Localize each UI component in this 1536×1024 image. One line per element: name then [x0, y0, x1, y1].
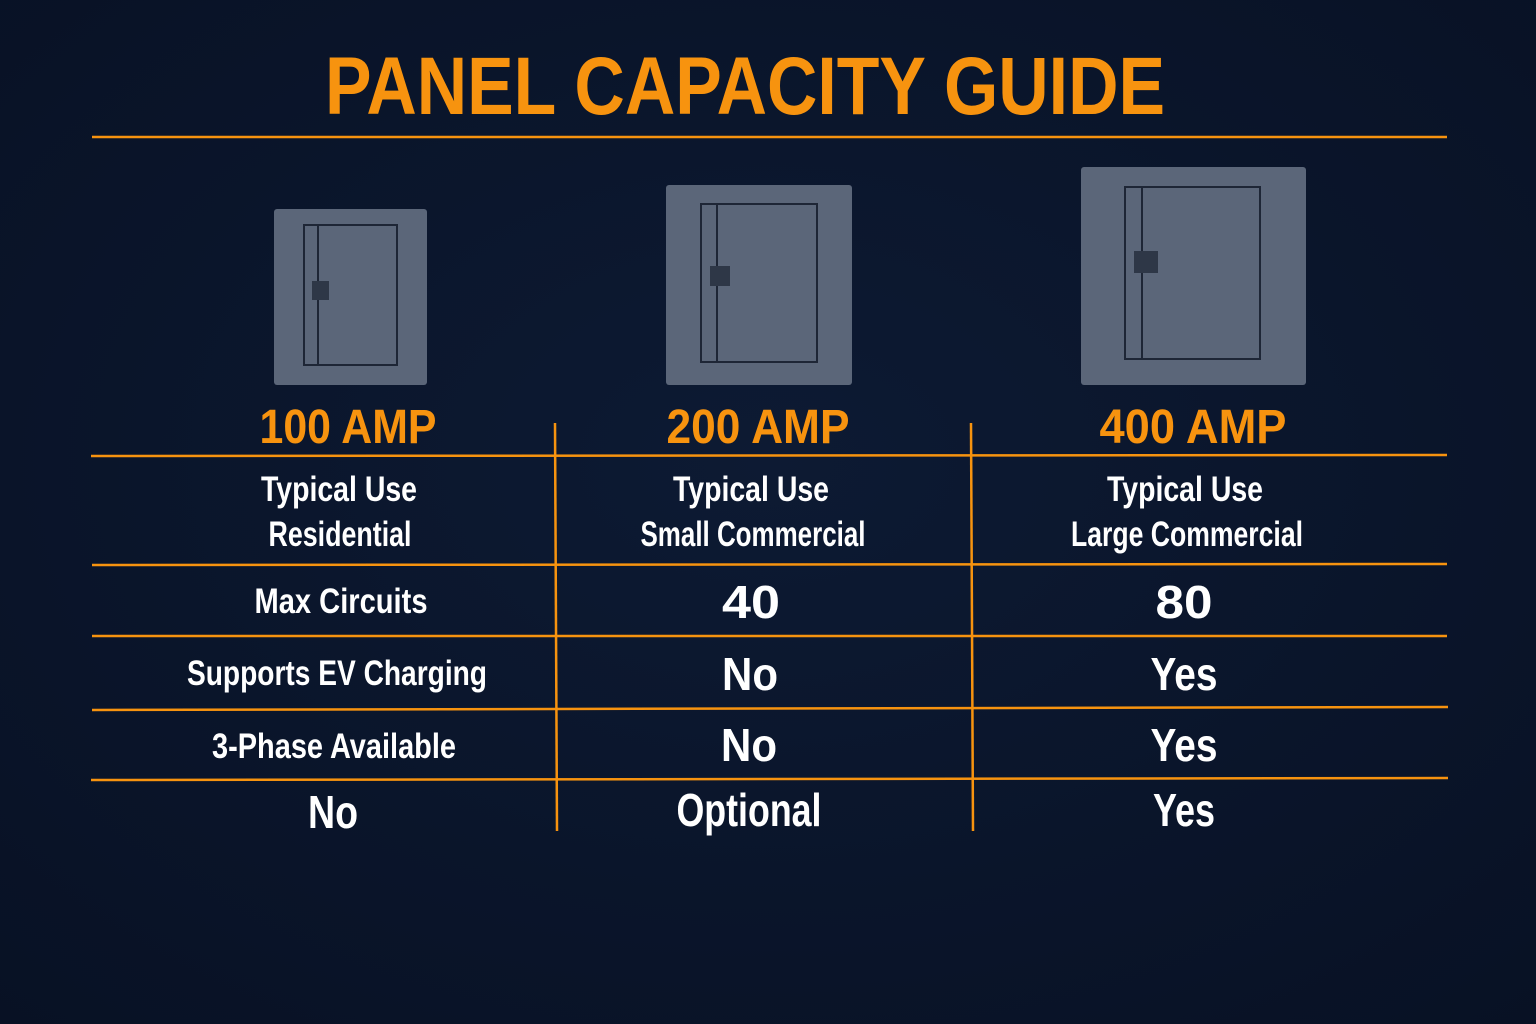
table text: Optional	[676, 784, 822, 836]
icon: 100 amp panel	[274, 209, 427, 385]
table grid	[91, 423, 1448, 831]
table text: Large Commercial	[1071, 515, 1303, 554]
icon: 200 amp panel	[666, 185, 852, 385]
table text: 80	[1156, 576, 1212, 628]
table text: Small Commercial	[640, 515, 866, 554]
table text: 40	[722, 576, 780, 628]
table text: No	[308, 786, 358, 838]
table text: No	[721, 719, 777, 771]
table text: Yes	[1153, 784, 1215, 836]
table text: Yes	[1150, 719, 1218, 771]
amp labels	[260, 401, 1286, 454]
table text: Typical Use	[1107, 470, 1263, 509]
table text: 3-Phase Available	[212, 727, 456, 766]
table text: Residential	[268, 515, 412, 554]
table text: Typical Use	[261, 470, 417, 509]
amp labels: 100 AMP	[260, 401, 436, 454]
table text: Supports EV Charging	[187, 654, 487, 693]
table text: Typical Use	[673, 470, 829, 509]
table text	[187, 470, 1303, 838]
title: PANEL CAPACITY GUIDE	[325, 41, 1165, 132]
amp labels: 200 AMP	[666, 401, 850, 454]
table text: Yes	[1150, 648, 1218, 700]
icon: 400 amp panel	[1081, 167, 1306, 385]
table text: Max Circuits	[254, 582, 428, 621]
amp labels: 400 AMP	[1100, 401, 1286, 454]
table text: No	[722, 648, 778, 700]
